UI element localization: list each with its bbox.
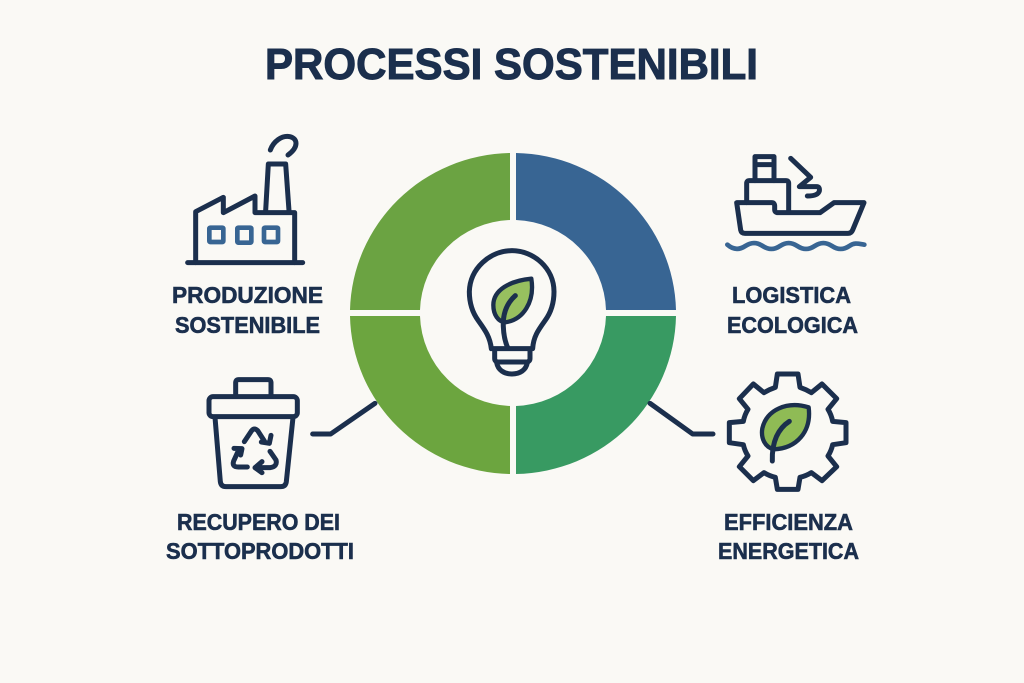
icon: gear with leaf xyxy=(650,374,846,489)
label: recupero dei sottoprodotti: SOTTOPRODOTTI xyxy=(166,538,354,564)
label: efficienza energetica: EFFICIENZA xyxy=(724,509,853,535)
segment: top right xyxy=(516,153,676,310)
icon: ship xyxy=(727,157,864,249)
smoke xyxy=(270,136,296,155)
donut chart xyxy=(350,153,676,474)
building xyxy=(196,196,295,263)
connector line xyxy=(313,403,375,434)
segment: top left xyxy=(350,153,510,310)
connector line xyxy=(650,403,713,434)
crane xyxy=(791,158,819,196)
label: efficienza energetica: ENERGETICA xyxy=(718,538,859,564)
label: logistica ecologica: LOGISTICA xyxy=(732,282,851,308)
label: produzione sostenibile xyxy=(172,282,323,338)
label: recupero dei sottoprodotti: RECUPERO DEI xyxy=(177,509,340,535)
recycle arrows xyxy=(244,429,271,443)
waves xyxy=(727,243,864,249)
cabin xyxy=(747,181,789,211)
icon: factory xyxy=(188,136,303,263)
label: produzione sostenibile: SOSTENIBILE xyxy=(175,312,320,338)
icon: light bulb with leaf xyxy=(469,251,554,374)
leaf xyxy=(493,279,532,322)
chimney xyxy=(266,164,289,211)
funnel xyxy=(755,157,774,181)
label: produzione sostenibile: PRODUZIONE xyxy=(172,282,323,308)
lid xyxy=(209,397,297,417)
label: logistica ecologica xyxy=(727,282,858,338)
gear xyxy=(729,374,846,489)
leaf xyxy=(762,405,809,449)
bulb xyxy=(469,251,554,349)
icon: recycling bin xyxy=(209,380,375,487)
segment: bottom right xyxy=(516,316,676,474)
label: recupero dei sottoprodotti xyxy=(166,509,354,564)
windows xyxy=(209,228,278,243)
ground line xyxy=(188,255,303,270)
hull xyxy=(737,203,864,233)
label: logistica ecologica: ECOLOGICA xyxy=(727,312,858,338)
label: efficienza energetica xyxy=(718,509,859,564)
handle xyxy=(236,380,271,396)
title: PROCESSI SOSTENIBILI xyxy=(265,40,758,89)
segment: bottom left xyxy=(350,316,510,474)
body xyxy=(215,417,293,487)
